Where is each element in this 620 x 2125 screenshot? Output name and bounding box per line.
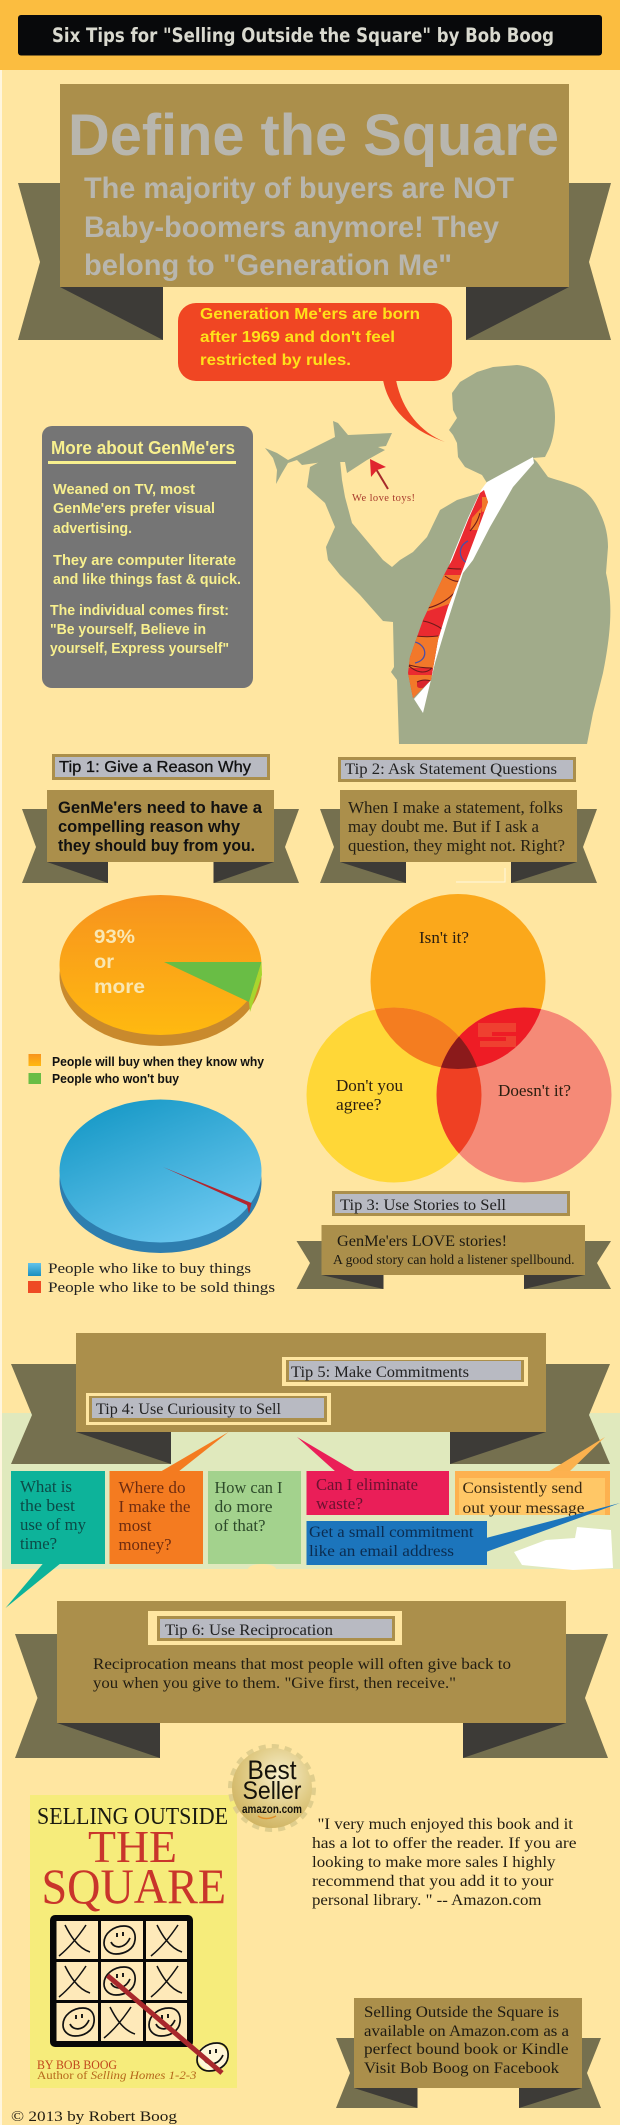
callout: small commitment: like an email address bbox=[309, 1543, 454, 1560]
tip 1 text: GenMe'ers need to have a bbox=[58, 798, 263, 817]
top title band bbox=[0, 0, 620, 70]
panel text: GenMe'ers prefer visual bbox=[53, 501, 215, 517]
venn diagram bbox=[306, 894, 612, 1182]
tip 3 heading: Tip 3: Use Stories to Sell bbox=[340, 1197, 507, 1214]
pie label: more bbox=[94, 976, 145, 998]
legend: pie 2: People who like to buy things bbox=[48, 1261, 251, 1277]
man silhouette with shark, tie and arrow bbox=[265, 365, 610, 744]
bubble text: after 1969 and don't feel bbox=[200, 329, 395, 346]
panel text: yourself, Express yourself" bbox=[50, 641, 229, 657]
tip 3 heading bbox=[334, 1192, 568, 1214]
light green band bbox=[2, 1413, 620, 1569]
testimonial quote: looking to make more sales I highly bbox=[312, 1854, 556, 1871]
callout: small commitment bbox=[306, 1503, 620, 1565]
tip 5 heading bbox=[282, 1357, 528, 1386]
tip 3 text: A good story can hold a listener spellbound. bbox=[333, 1252, 574, 1267]
callout: eliminate waste: waste? bbox=[316, 1494, 363, 1513]
heading: Define the Square bbox=[68, 103, 559, 168]
bubble text: Generation Me'ers are born bbox=[200, 306, 420, 323]
panel text: The individual comes first: bbox=[50, 603, 229, 619]
callout: best use of time bbox=[6, 1471, 105, 1608]
legend: pie 1 bbox=[28, 1054, 264, 1086]
callout: consistently send bbox=[455, 1437, 610, 1517]
venn labels: Isn't it? bbox=[419, 928, 469, 947]
tip 4 heading bbox=[86, 1393, 331, 1425]
panel text: advertising. bbox=[53, 521, 132, 537]
tip 2 heading: Tip 2: Ask Statement Questions bbox=[345, 761, 557, 778]
pie label: 93% bbox=[94, 926, 135, 948]
pie label: or bbox=[94, 951, 114, 973]
pie chart: like to buy bbox=[60, 1100, 262, 1253]
availability text: available on Amazon.com as a bbox=[364, 2023, 569, 2040]
tip 1 text: they should buy from you. bbox=[58, 836, 255, 855]
tip 2 text: may doubt me. But if I ask a bbox=[348, 817, 540, 836]
speech bubble bbox=[178, 303, 452, 442]
venn labels: Don't you bbox=[336, 1076, 403, 1095]
tip 3 banner bbox=[296, 1225, 611, 1289]
callout: consistently send: Consistently send bbox=[462, 1480, 582, 1497]
best seller badge: amazon.com bbox=[242, 1804, 302, 1816]
best seller badge: Best bbox=[248, 1755, 297, 1785]
legend: pie 2: People who like to be sold things bbox=[48, 1280, 275, 1296]
testimonial quote: personal library. " -- Amazon.com bbox=[312, 1892, 542, 1909]
panel heading: More about GenMe'ers bbox=[51, 438, 235, 458]
book title: SQUARE bbox=[42, 1858, 226, 1914]
tip 2 heading bbox=[340, 758, 574, 780]
tips 4 and 5 banner bbox=[11, 1333, 610, 1464]
tip 3 text: GenMe'ers LOVE stories! bbox=[337, 1233, 507, 1250]
best seller badge bbox=[230, 1746, 314, 1830]
callout: most money: Where do bbox=[118, 1478, 186, 1497]
copyright: © 2013 by Robert Boog bbox=[11, 2109, 178, 2125]
availability text bbox=[364, 2004, 569, 2077]
testimonial quote: "I very much enjoyed this book and it bbox=[318, 1816, 574, 1833]
panel text: They are computer literate bbox=[53, 553, 236, 569]
callout: most money: money? bbox=[118, 1535, 172, 1554]
tip 6 heading bbox=[148, 1611, 402, 1645]
escaping smiley bbox=[197, 2043, 228, 2071]
book title: SELLING OUTSIDE bbox=[37, 1804, 228, 1830]
callout: do more bbox=[208, 1471, 301, 1574]
pie label bbox=[94, 926, 145, 998]
red strike line bbox=[108, 1976, 222, 2073]
subheading bbox=[84, 172, 514, 282]
callout: best use of time: use of my bbox=[20, 1515, 87, 1534]
tip 4 heading: Tip 4: Use Curiousity to Sell bbox=[96, 1401, 281, 1418]
tip 1 text: compelling reason why bbox=[58, 817, 241, 836]
subheading: Baby-boomers anymore! They bbox=[84, 211, 499, 244]
callout: do more: do more bbox=[214, 1497, 272, 1516]
venn labels bbox=[336, 928, 571, 1114]
shirt bbox=[414, 457, 534, 713]
legend: pie 1: People will buy when they know why bbox=[52, 1055, 264, 1069]
venn labels: Doesn't it? bbox=[498, 1081, 571, 1100]
best seller badge: Seller bbox=[242, 1777, 302, 1805]
tip 3 text bbox=[333, 1233, 574, 1267]
callout: best use of time: the best bbox=[20, 1496, 75, 1515]
tip 5 heading: Tip 5: Make Commitments bbox=[291, 1364, 469, 1381]
tip 6 text: you when you give to them. "Give first, then receive." bbox=[93, 1675, 456, 1692]
tip 6 text bbox=[93, 1656, 511, 1692]
tip 1 heading: Tip 1: Give a Reason Why bbox=[59, 759, 251, 776]
tip 6 banner bbox=[15, 1601, 608, 1758]
book author: BY BOB BOOG bbox=[37, 2058, 117, 2072]
panel text: "Be yourself, Believe in bbox=[50, 622, 206, 638]
subheading: belong to "Generation Me" bbox=[84, 249, 452, 282]
availability text: Visit Bob Boog on Facebook bbox=[364, 2060, 559, 2077]
subheading: The majority of buyers are NOT bbox=[84, 172, 514, 205]
red arrow bbox=[370, 459, 388, 489]
panel: more about GenMe'ers bbox=[42, 426, 253, 688]
tip 1 banner bbox=[22, 790, 299, 883]
bubble text bbox=[200, 306, 420, 369]
toy shark bbox=[265, 421, 392, 484]
panel text: and like things fast & quick. bbox=[53, 572, 241, 588]
tip 2 text: question, they might not. Right? bbox=[348, 836, 565, 855]
legend: pie 1: People who won't buy bbox=[52, 1072, 179, 1086]
availability text: Selling Outside the Square is bbox=[364, 2004, 559, 2021]
callout: do more: How can I bbox=[214, 1478, 282, 1497]
testimonial quote bbox=[312, 1816, 577, 1909]
testimonial quote: has a lot to offer the reader. If you are bbox=[312, 1835, 577, 1852]
panel text bbox=[50, 482, 241, 657]
tip 1 text bbox=[58, 798, 263, 855]
tip 1 heading bbox=[54, 756, 268, 778]
testimonial quote: recommend that you add it to your bbox=[312, 1873, 554, 1890]
callout: small commitment: Get a small commitment bbox=[309, 1524, 474, 1541]
venn labels: agree? bbox=[336, 1095, 382, 1114]
tip 2 banner bbox=[320, 790, 597, 883]
silhouette body bbox=[307, 365, 610, 744]
callout: eliminate waste bbox=[297, 1437, 449, 1515]
tie bbox=[408, 490, 488, 698]
shark caption: We love toys! bbox=[352, 493, 415, 504]
bubble text: restricted by rules. bbox=[200, 352, 351, 369]
callout: most money: I make the bbox=[118, 1497, 190, 1516]
pie chart: 93 percent buy bbox=[60, 895, 262, 1046]
book author: Author of Selling Homes 1-2-3 bbox=[37, 2068, 196, 2082]
callout: consistently send: out your message bbox=[462, 1500, 584, 1517]
tip 2 text bbox=[348, 798, 565, 855]
callout: best use of time: time? bbox=[20, 1534, 57, 1553]
white smudge bbox=[514, 1527, 613, 1570]
main banner: define the square bbox=[18, 84, 611, 340]
panel text: Weaned on TV, most bbox=[53, 482, 195, 498]
callout: most money bbox=[110, 1432, 228, 1564]
tip 6 heading: Tip 6: Use Reciprocation bbox=[165, 1622, 333, 1639]
availability text: perfect bound book or Kindle bbox=[364, 2041, 568, 2058]
book author bbox=[37, 2058, 196, 2082]
callout: do more: of that? bbox=[214, 1516, 266, 1535]
book title bbox=[37, 1804, 228, 1914]
book title: THE bbox=[88, 1821, 177, 1872]
book cover bbox=[30, 1795, 237, 2088]
callout: eliminate waste: Can I eliminate bbox=[316, 1475, 418, 1494]
availability banner bbox=[336, 1998, 601, 2108]
callout: best use of time: What is bbox=[20, 1477, 72, 1496]
tip 6 text: Reciprocation means that most people will often give back to bbox=[93, 1656, 511, 1673]
callout: most money: most bbox=[118, 1516, 152, 1535]
tic tac toe grid bbox=[50, 1915, 193, 2047]
tip 2 text: When I make a statement, folks bbox=[348, 798, 563, 817]
legend: pie 2 bbox=[28, 1261, 275, 1296]
